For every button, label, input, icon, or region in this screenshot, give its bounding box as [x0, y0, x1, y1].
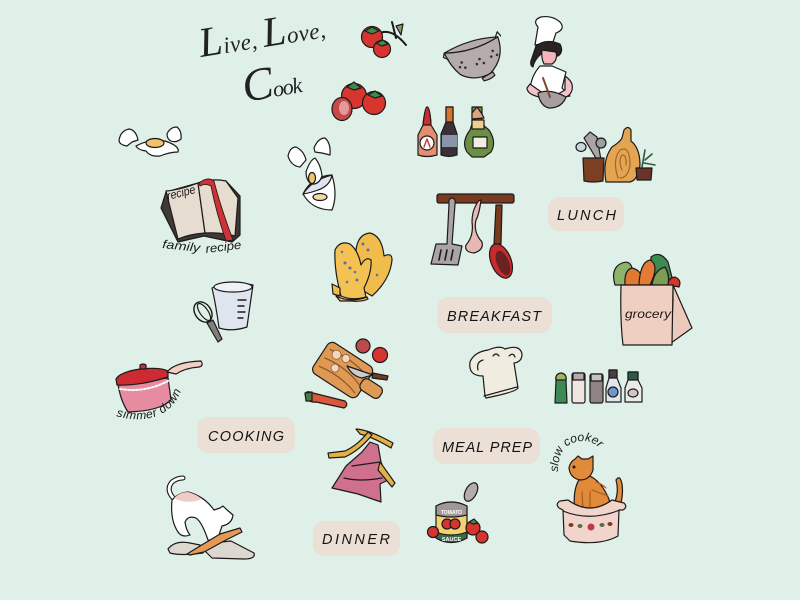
icon: recipe book: family: [162, 237, 202, 255]
label: meal prep: [433, 428, 540, 464]
icon: grocery bag: grocery: [625, 307, 672, 321]
icon: spice jars: [555, 370, 642, 403]
label: lunch: LUNCH: [557, 208, 617, 224]
title: Live, Love,: [194, 2, 328, 67]
icon: measuring cup and whisk: [190, 282, 253, 342]
label: dinner: [313, 521, 400, 556]
icon: hanging utensils: [431, 194, 517, 281]
icon: utensil crock, board and plant: [576, 128, 655, 182]
label: cooking: [197, 417, 295, 453]
icon: chef hat: [470, 347, 522, 398]
icon: eggs and bowl: [288, 138, 335, 210]
label: lunch: [548, 197, 624, 231]
icon: tomato sauce can: TOMATO: [441, 510, 462, 516]
icon: tomato sauce can: SAUCE: [442, 537, 461, 543]
icon: cat with rolling pin: [168, 478, 254, 559]
icon: cat in slow cooker: [550, 432, 626, 544]
icon: hot sauce bottle: [418, 107, 437, 156]
icon: saucepan: [115, 360, 203, 420]
icon: cracked egg: [119, 127, 181, 156]
icon: cat in slow cooker: slow cooker: [550, 432, 604, 472]
icon: tomatoes and slice: [332, 82, 386, 120]
icon: soy sauce bottle: [441, 107, 457, 156]
label: meal prep: MEAL PREP: [442, 440, 532, 456]
icon: apron: [328, 429, 395, 502]
label: dinner: DINNER: [322, 532, 391, 548]
icon: olive oil bottle: [465, 107, 494, 157]
label: breakfast: [437, 297, 552, 333]
icon: recipe book: [161, 179, 242, 256]
title: Cook: [238, 51, 306, 112]
icon: recipe book: recipe: [205, 238, 242, 256]
label: breakfast: BREAKFAST: [447, 309, 542, 325]
icon: oven mitts: [332, 233, 392, 301]
icon: recipe book: recipe: [165, 182, 197, 203]
icon: tomatoes on the vine: [362, 22, 406, 58]
icon: tomato sauce can: [428, 481, 488, 543]
icon: chef mixing: [527, 17, 572, 108]
label: cooking: COOKING: [208, 429, 284, 445]
icon: cutting board with knife and vegetables: [305, 339, 391, 410]
title: [194, 2, 328, 112]
icon: saucepan: simmer down: [116, 389, 181, 420]
icon: colander: [441, 31, 512, 90]
icon: grocery bag: [614, 254, 692, 345]
